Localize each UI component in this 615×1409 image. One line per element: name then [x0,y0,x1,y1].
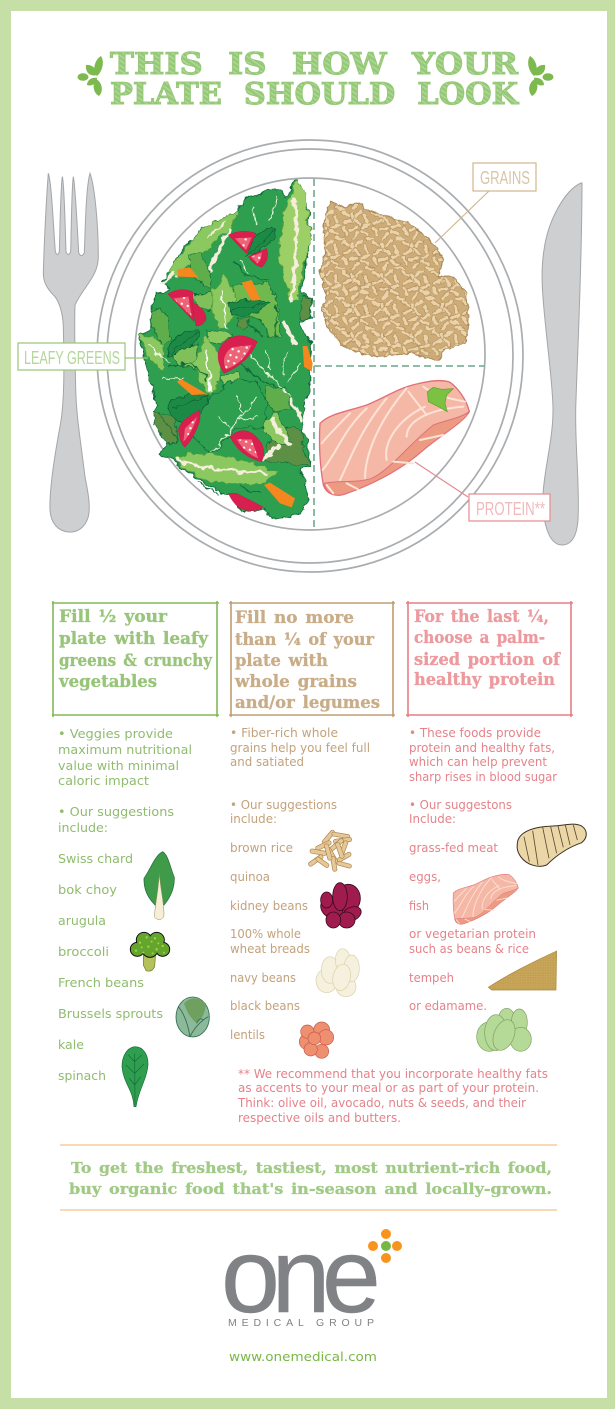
plate divider lines [314,179,485,530]
text block: protein: which can help prevent [409,754,547,769]
text block: greens: French beans [58,975,144,990]
text block: greens: include: [58,820,108,835]
footnote [237,1066,548,1125]
text block: grains: quinoa [230,869,270,884]
text block: greens: value with minimal [58,758,179,773]
heading box: grains: plate with [235,651,328,670]
heading box: grains [229,601,395,717]
text block: protein: sharp rises in blood sugar [409,769,558,784]
text block: grains [230,725,370,1042]
bottom romaine leaf [175,453,278,485]
icon: navy beans [316,949,359,997]
heading box: protein [406,601,573,717]
icon: fish fillet [453,874,518,924]
heading box: protein: sized portion of [414,650,561,669]
text block: greens: • Veggies provide [58,726,173,741]
title [78,46,554,111]
heading box: greens [52,601,219,717]
heading box: greens: plate with leafy [59,629,208,648]
panel: leafy greens column [52,601,219,1107]
carrots [177,267,313,507]
panel: grains column [229,601,548,1125]
dark spinach leaves [167,228,277,424]
label: grains: GRAINS [480,168,530,188]
text block: protein: protein and healthy fats, [409,740,555,755]
text block: greens: bok choy [58,882,117,897]
base leaves [138,180,312,518]
text block: protein: or vegetarian protein [409,926,536,941]
protein: salmon [319,381,469,495]
icon: tempeh [488,951,557,990]
arugula leaf [188,252,213,290]
text block: protein [409,725,558,1013]
text block: greens: Brussels sprouts [58,1006,163,1021]
heading box: greens: greens & crunchy [59,651,212,670]
icon: right leaf ornament [528,56,554,96]
icon: grilled steak [517,824,586,866]
text block: grains: 100% whole [230,926,301,941]
plate rings [97,140,523,572]
plate illustration [97,140,523,572]
text block: greens [58,726,192,1083]
icon: logo dots [368,1229,402,1263]
grains [320,202,468,360]
leaves [138,180,312,518]
text block: greens: • Our suggestions [58,804,174,819]
lower romaine leaf [195,335,220,395]
middle romaine leaf [212,275,235,328]
heading box: protein: For the last ¼, [414,607,549,626]
text block: greens: spinach [58,1068,106,1083]
olive and light patches [153,283,312,467]
text block: grains: navy beans [230,970,296,985]
top-left romaine leaf [168,212,237,277]
heading box: grains: than ¼ of your [235,630,374,649]
left leaves [152,307,172,347]
big lower leaf [192,378,268,455]
heading box: greens: Fill ½ your [59,607,167,626]
text block: greens: kale [58,1037,84,1052]
tomatoes [168,231,268,511]
text block: grains: include: [230,811,277,826]
logo subtitle: MEDICAL GROUP [228,1317,374,1329]
text block: protein: Include: [409,811,456,826]
text block: greens: maximum nutritional [58,742,192,757]
right leaf veins and stems [240,198,300,398]
icon: brussels sprout [176,997,209,1037]
text block: grains: and satiated [230,754,304,769]
text block: grains: brown rice [230,840,293,855]
label: protein [415,462,550,521]
icon: brown rice [308,829,352,872]
icon: kidney beans [317,883,364,928]
text block: protein: grass-fed meat [409,840,498,855]
text block: grains: lentils [230,1027,265,1042]
text block: grains: • Our suggestions [230,797,337,812]
callout: organic food advice [60,1145,557,1210]
icon: knife [542,183,582,545]
icon: herb garnish [427,387,453,412]
label: leafy greens: LEAFY GREENS [24,348,120,368]
text block: protein: fish [409,898,429,913]
icon: edamame [477,1008,531,1054]
heading box: grains: and/or legumes [235,693,380,712]
logo wordmark: one [221,1217,377,1335]
label: protein: PROTEIN** [476,499,545,519]
icon: fork [43,173,98,532]
heading box: protein: healthy protein [414,670,555,689]
callout: organic food advice: buy organic food that's in-season and locally-grown. [69,1181,552,1198]
text block: protein: tempeh [409,970,454,985]
text block: grains: grains help you feel full [230,740,370,755]
text block: grains: • Fiber-rich whole [230,725,338,740]
heading box: grains: whole grains [234,672,357,691]
title text: THIS IS HOW YOUR [110,46,519,81]
text block: protein: • These foods provide [409,725,541,740]
salad: leafy greens half [138,180,313,518]
text block: greens: arugula [58,913,106,928]
text block: greens: caloric impact [58,773,149,788]
text block: protein: • Our suggestons [409,797,512,812]
top romaine leaf [278,180,311,302]
website url: www.onemedical.com [229,1349,377,1364]
icon: left leaf ornament [78,56,103,96]
icon: lentils [299,1022,334,1058]
panel: protein column [406,601,586,1054]
label: leafy greens [18,343,148,370]
icon: swiss chard [144,852,174,919]
title text: PLATE SHOULD LOOK [110,76,519,111]
heading box: greens: vegetables [58,672,157,691]
text block: protein: eggs, [409,869,441,884]
icon: spinach leaf [122,1047,148,1107]
text block: greens: broccoli [58,944,109,959]
text block: grains: black beans [230,998,300,1013]
title text [110,46,519,111]
text block: greens: Swiss chard [58,851,133,866]
heading box: grains: Fill no more [235,608,354,627]
heading box: protein: choose a palm- [414,628,545,647]
icon: broccoli [130,932,170,971]
footnote: as accents to your meal or as part of your protein. [238,1080,539,1095]
logo: One Medical Group [221,1217,402,1335]
footnote: respective oils and butters. [238,1110,401,1125]
label: grains [435,163,536,243]
text block: protein: such as beans & rice [409,941,529,956]
footnote: ** We recommend that you incorporate healthy fats [238,1066,548,1081]
callout: organic food advice: To get the freshest, tastiest, most nutrient-rich food, [71,1160,552,1177]
text block: protein: or edamame. [409,998,487,1013]
dark frill lines [160,260,287,495]
footnote: Think: olive oil, avocado, nuts & seeds, and their [237,1095,527,1110]
text block: grains: wheat breads [230,941,310,956]
text block: grains: kidney beans [230,898,308,913]
